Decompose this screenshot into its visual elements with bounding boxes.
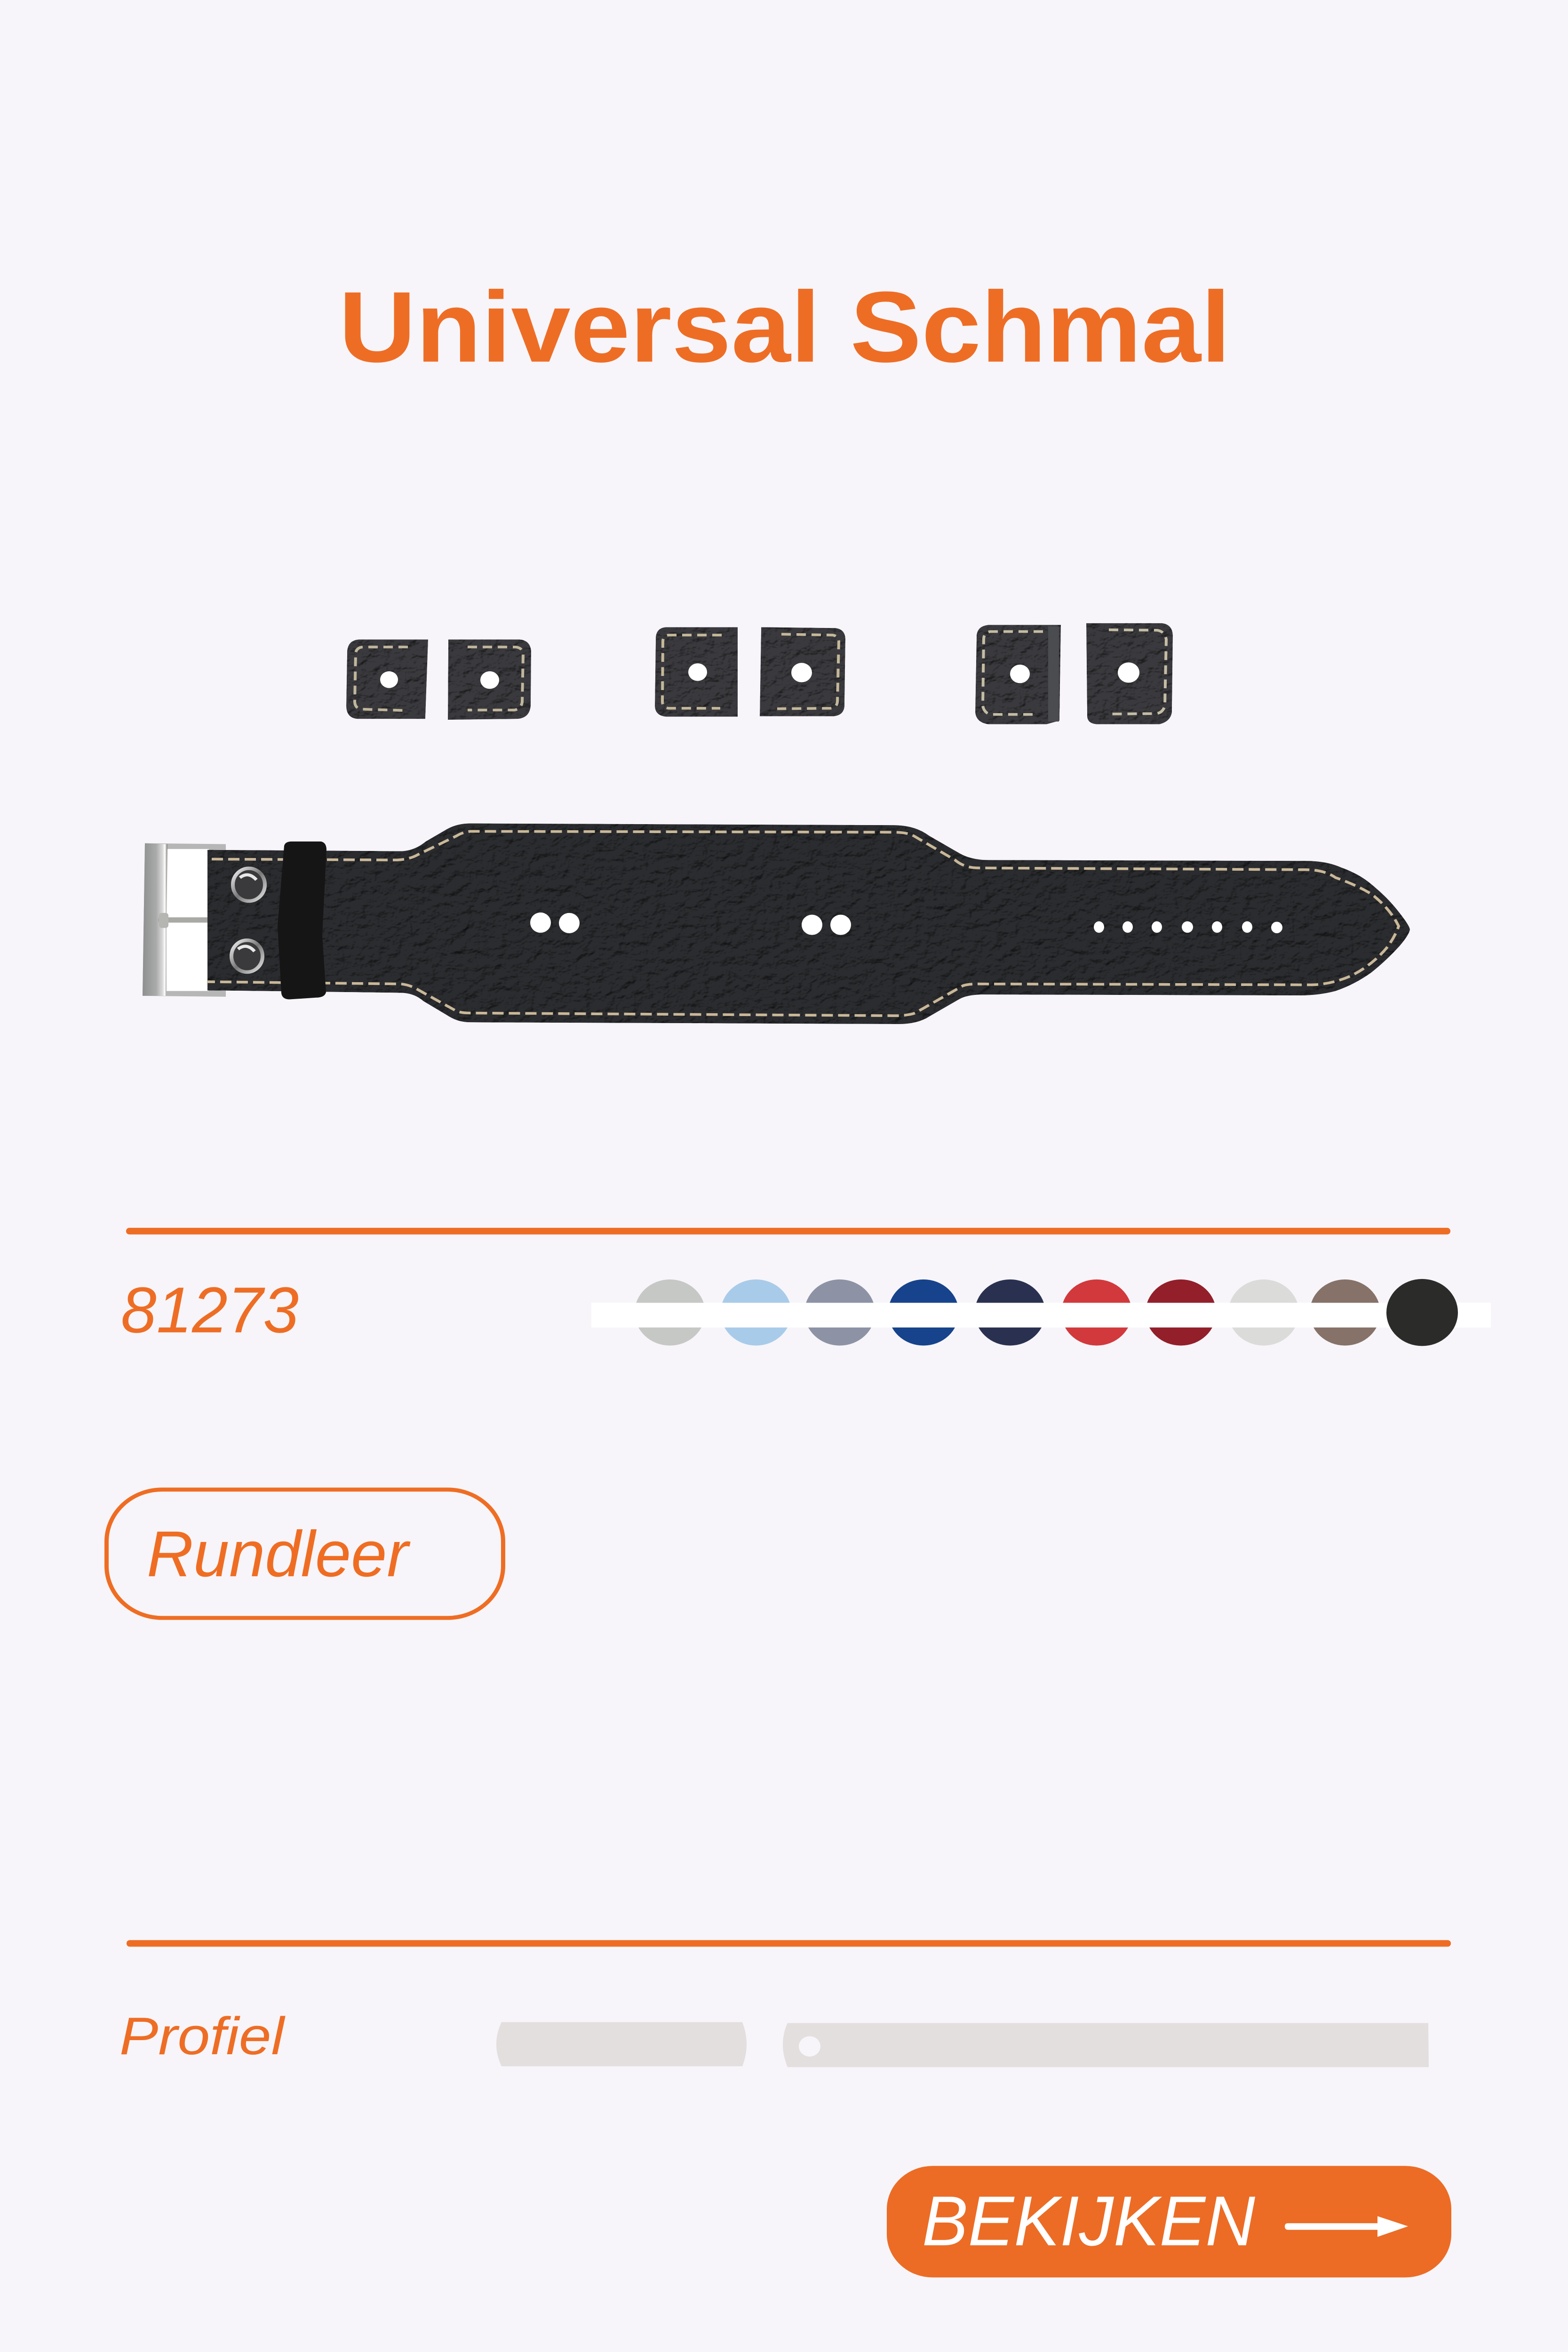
divider line top	[126, 1228, 1450, 1234]
buckle	[143, 843, 226, 997]
title: Universal Schmal	[339, 270, 1231, 383]
adjustment holes	[1094, 922, 1282, 933]
article number: 81273	[121, 1274, 299, 1346]
spacer piece 1 left	[346, 639, 428, 719]
profile silhouette	[496, 2022, 1429, 2067]
centre holes	[530, 913, 851, 935]
spacer piece 2 right	[760, 627, 845, 716]
arrow	[1285, 2216, 1408, 2237]
colour swatches	[591, 1279, 1491, 1346]
eyelets	[231, 868, 265, 972]
spacer piece 3 left	[975, 625, 1061, 724]
keeper loop	[278, 842, 326, 1000]
spacer piece 3 right	[1086, 623, 1173, 724]
strap body	[207, 823, 1410, 1024]
divider line bottom	[127, 1940, 1451, 1947]
leather strap with buckle	[143, 823, 1410, 1024]
material tag	[106, 1490, 503, 1618]
profile label: Profiel	[119, 2007, 286, 2066]
spacer piece 1 right	[448, 639, 531, 720]
button	[887, 2166, 1451, 2278]
button: BEKIJKEN	[922, 2182, 1256, 2260]
material tag: Rundleer	[147, 1518, 411, 1590]
strap spacer pieces	[346, 623, 1173, 724]
spacer piece 2 left	[655, 627, 738, 717]
stitching	[207, 831, 1399, 1016]
